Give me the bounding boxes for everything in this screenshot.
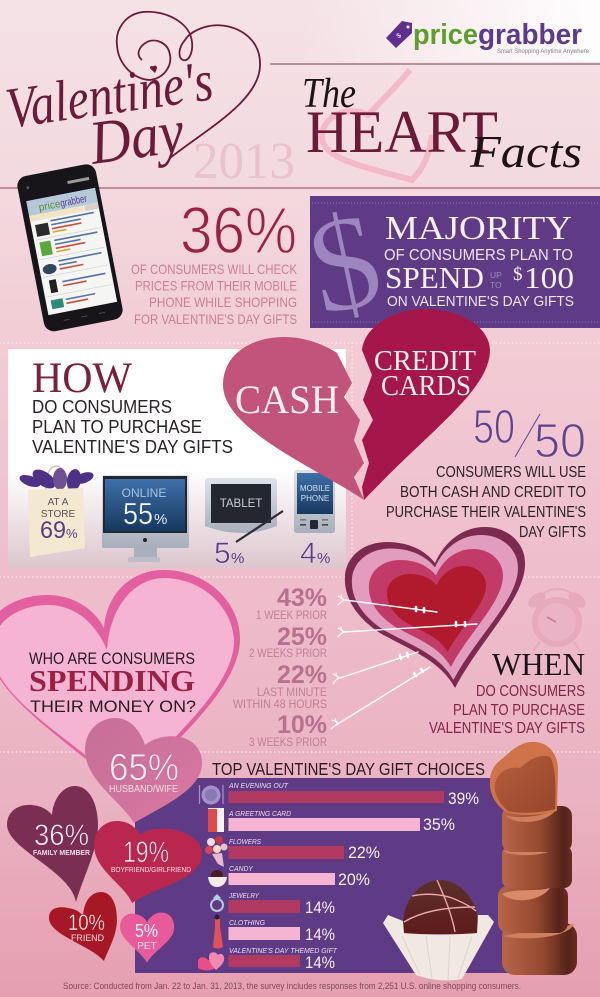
arrows from stats into heart [331, 595, 477, 729]
bar chart: gift choices: 39% [448, 789, 479, 808]
bar chart: gift choices: 35% [423, 815, 455, 834]
stat: 50/50 [473, 401, 586, 468]
logo: pricegrabber: $ [396, 32, 403, 40]
heart: 19% boyfriend/girlfriend: 19% [123, 836, 169, 869]
icon: mobile phone 4% [294, 470, 335, 570]
bar chart: gift choices: JEWELRY [228, 891, 260, 900]
text: when subtitle [429, 683, 585, 737]
stats: when percentages [233, 584, 327, 749]
broken heart: cash: CASH [235, 377, 339, 422]
icon: flowers [205, 836, 228, 867]
bar chart: gift choices: 14% [305, 953, 335, 972]
broken heart: credit cards [362, 309, 490, 500]
panel: majority spend up to $100: $ [296, 184, 394, 344]
icon: dress [213, 914, 223, 948]
title: Valentine's Day script with heart swirl [2, 12, 260, 178]
icon: monitor 55% [102, 475, 189, 562]
heart: 19% boyfriend/girlfriend [94, 821, 202, 903]
year 2013: 2013 [193, 133, 295, 190]
panel: how consumers purchase [8, 349, 346, 570]
heart: 65% husband/wife: 65% [109, 747, 179, 789]
text: how subtitle [32, 396, 233, 457]
panel: majority spend up to $100: SPEND [385, 260, 484, 295]
stat: 36% check prices: OF CONSUMERS WILL CHECK [131, 261, 298, 277]
heart: 10% friend: FRIEND [71, 933, 104, 944]
heading: how: HOW [32, 355, 132, 402]
phone illustration: price [38, 198, 62, 214]
title: Valentine's Day script with heart swirl: Valentine's [2, 48, 217, 141]
icon: tablet 5%: 5 [214, 537, 231, 570]
heart: 36% family member: 36% [34, 819, 89, 852]
stats: when percentages: 25% [277, 623, 327, 651]
stats: when percentages: LAST MINUTE [257, 687, 327, 699]
text: how subtitle: DO CONSUMERS [32, 396, 172, 417]
stats: when percentages: 43% [277, 584, 327, 612]
icon: mobile phone 4%: PHONE [301, 494, 329, 503]
layered heart [345, 527, 525, 688]
bar chart: gift choices: AN EVENING OUT [228, 781, 289, 790]
bar chart: gift choices [228, 781, 479, 972]
source note: Source: Conducted from Jan. 22 to Jan. 31, 2013, the survey includes responses from 2,251 U.S. online shopping consumers. [63, 981, 521, 992]
icon: tablet 5%: % [231, 550, 244, 567]
stat: 36% check prices: PHONE WHILE SHOPPING [149, 294, 297, 310]
heading: when: WHEN [492, 646, 585, 682]
icon: shopping bag 69% [18, 466, 95, 557]
icon: tablet 5%: TABLET [220, 498, 262, 510]
stat: 36% check prices: FOR VALENTINE'S DAY GIFTS [134, 311, 297, 327]
icon: mobile phone 4%: 4 [300, 537, 317, 570]
icon: monitor 55%: % [154, 511, 167, 528]
heart: 5% pet: 5% [135, 921, 158, 941]
heart: 10% friend: 10% [68, 910, 105, 935]
decorative check heart [322, 70, 432, 180]
panel: majority spend up to $100: MAJORITY [385, 210, 572, 247]
bar chart: gift choices: A GREETING CARD [228, 809, 292, 818]
stats: when percentages: 1 WEEK PRIOR [256, 610, 327, 622]
logo: pricegrabber: grabber [478, 19, 582, 51]
stats: when percentages: WITHIN 48 HOURS [233, 699, 327, 711]
icon: monitor 55%: ONLINE [122, 486, 166, 500]
title: The Heart Facts: The [302, 71, 356, 117]
icon: ring [211, 894, 223, 911]
heart: 19% boyfriend/girlfriend: BOYFRIEND/GIRLFRIEND [111, 865, 192, 874]
text: 50/50 description [386, 464, 586, 541]
bar chart: gift choices: CANDY [229, 864, 254, 873]
phone illustration: grabber [59, 193, 88, 210]
bar chart: gift choices: FLOWERS [229, 837, 261, 846]
stats: when percentages: 3 WEEKS PRIOR [249, 737, 327, 749]
title: Valentine's Day script with heart swirl: Day [85, 97, 188, 178]
heading: top gift choices: TOP VALENTINE'S DAY GIFT CHOICES [212, 759, 485, 779]
chocolate heart stack [490, 742, 577, 975]
stat: 50/50: 50 [473, 401, 515, 454]
logo: pricegrabber: Smart Shopping Anytime Anywhere [497, 49, 590, 55]
icon: monitor 55%: 55 [123, 496, 153, 531]
panel: majority spend up to $100: ON VALENTINE'S DAY GIFTS [387, 293, 574, 310]
text: how subtitle: VALENTINE'S DAY GIFTS [32, 436, 233, 457]
stat: 36% check prices: 36% [180, 193, 297, 267]
icon: alarm clock [525, 589, 589, 651]
panel: majority spend up to $100: $ [513, 264, 522, 285]
phone illustration [16, 163, 124, 333]
icon: gift box hearts [198, 952, 224, 970]
heart: 5% pet [120, 912, 174, 963]
heart: 36% family member [7, 786, 98, 902]
heart: who are consumers spending: SPENDING [29, 663, 195, 698]
panel: majority spend up to $100: 100 [524, 260, 574, 295]
bar chart: gift choices: CLOTHING [229, 918, 265, 927]
logo: pricegrabber: price [413, 19, 478, 51]
panel: majority spend up to $100: OF CONSUMERS PLAN TO [384, 247, 573, 264]
stats: when percentages: 22% [277, 661, 327, 689]
text: 50/50 description: DAY GIFTS [519, 524, 586, 541]
icon: tablet 5% [205, 478, 283, 570]
title: The Heart Facts: HEART [306, 99, 498, 165]
text: how subtitle: PLAN TO PURCHASE [32, 416, 202, 437]
bar chart: gift choices: 14% [305, 925, 335, 944]
chocolate cup [383, 880, 494, 980]
title: The Heart Facts [302, 71, 582, 177]
stats: when percentages: 10% [277, 711, 327, 739]
icon: mobile phone 4%: MOBILE [300, 484, 330, 493]
heart: 65% husband/wife [85, 718, 202, 823]
heart: who are consumers spending [0, 570, 240, 795]
bar chart: gift choices: 14% [305, 898, 335, 917]
stat: 36% check prices [131, 193, 298, 327]
broken heart: credit cards: CREDIT [374, 345, 476, 377]
panel: majority spend up to $100: UP [490, 270, 502, 280]
heart: 10% friend [49, 892, 117, 961]
broken heart: credit cards: CARDS [381, 370, 471, 402]
bar chart: gift choices: 22% [348, 843, 380, 862]
icon: cupcake [208, 870, 227, 887]
logo: pricegrabber [386, 19, 590, 55]
icon: greeting card [208, 808, 224, 832]
heart: who are consumers spending: WHO ARE CONSUMERS [29, 649, 195, 668]
bar chart: gift choices: 20% [338, 870, 370, 889]
heart: 36% family member: FAMILY MEMBER [33, 848, 91, 857]
icon: shopping bag 69%: AT A [48, 497, 69, 508]
icon: mobile phone 4%: % [317, 550, 330, 567]
panel: top gift choices purple [135, 778, 512, 973]
stats: when percentages: 2 WEEKS PRIOR [249, 648, 327, 660]
title: The Heart Facts: Facts [469, 126, 582, 177]
stat: 50/50: 50 [534, 415, 586, 468]
icon: shopping bag 69%: % [66, 526, 78, 541]
icon: shopping bag 69%: 69 [40, 517, 66, 544]
icon: shopping bag 69%: STORE [41, 509, 75, 520]
panel: majority spend up to $100 [296, 184, 600, 344]
panel: majority spend up to $100: TO [490, 280, 502, 290]
broken heart: cash [223, 337, 364, 500]
heart: who are consumers spending: THEIR MONEY ON? [30, 697, 196, 716]
icon: dinner plate [200, 785, 223, 804]
stat: 36% check prices: PRICES FROM THEIR MOBILE [135, 278, 297, 294]
heart: 5% pet: PET [137, 941, 157, 952]
heart: 65% husband/wife: HUSBAND/WIFE [109, 784, 178, 795]
bar chart: gift choices: VALENTINE'S DAY THEMED GIFT [229, 946, 338, 955]
